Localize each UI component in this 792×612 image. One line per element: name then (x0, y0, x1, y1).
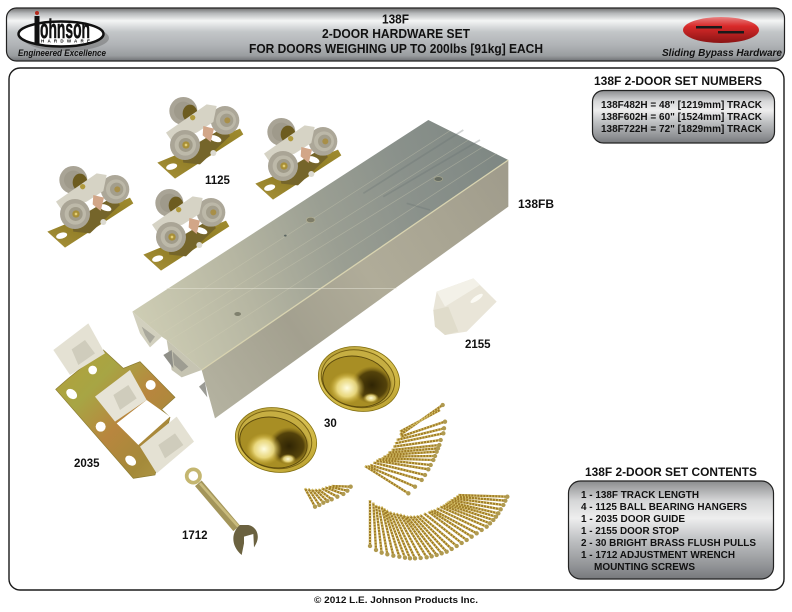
mounting screws (305, 405, 507, 558)
category label: Sliding Bypass Hardware (662, 47, 782, 59)
label 30: 30 (324, 418, 337, 430)
flush pull upper (312, 339, 406, 419)
heading: set numbers: 138F 2-DOOR SET NUMBERS (594, 74, 762, 88)
panel: set numbers: 138F482H = 48" [1219mm] TRACK (601, 100, 763, 111)
hanger 1125 top (157, 97, 243, 179)
panel: set contents: 1 - 2035 DOOR GUIDE (581, 514, 685, 525)
hanger 1125 left (47, 166, 133, 248)
panel: set contents: 1 - 138F TRACK LENGTH (581, 490, 699, 501)
hanger 1125 right (255, 118, 341, 200)
label 1125: 1125 (205, 175, 231, 187)
title text: 2-DOOR HARDWARE SET (322, 27, 470, 41)
panel: set contents: 2 - 30 BRIGHT BRASS FLUSH PULLS (581, 538, 756, 549)
door guide 2035 (53, 323, 194, 478)
label 138FB: 138FB (518, 199, 554, 211)
panel: set numbers (592, 90, 774, 143)
panel: set contents: 4 - 1125 BALL BEARING HANGERS (581, 502, 747, 513)
panel: set numbers: 138F722H = 72" [1829mm] TRACK (601, 124, 763, 135)
track 138FB (132, 120, 508, 418)
panel: set numbers: 138F602H = 60" [1524mm] TRACK (601, 112, 763, 123)
logo: Johnson Hardware: HARDWARE (41, 38, 90, 44)
wrench 1712 (187, 469, 258, 555)
door stop 2155 (433, 278, 497, 335)
footer copyright: © 2012 L.E. Johnson Products Inc. (314, 595, 478, 605)
title text (249, 12, 543, 56)
label 2155: 2155 (465, 339, 491, 351)
heading: set contents: 138F 2-DOOR SET CONTENTS (585, 465, 757, 479)
logo: Johnson Hardware: ohnson (40, 14, 90, 44)
logo: Johnson Hardware (18, 11, 109, 58)
icon: sliding bypass red oval (683, 17, 759, 43)
label 1712: 1712 (182, 530, 208, 542)
logo: Johnson Hardware: Engineered Excellence (18, 48, 106, 58)
label 2035: 2035 (74, 458, 100, 470)
header bar (6, 8, 784, 61)
panel: set contents: 1 - 2155 DOOR STOP (581, 526, 679, 537)
title text: FOR DOORS WEIGHING UP TO 200lbs [91kg] EACH (249, 42, 543, 56)
title text: 138F (382, 12, 409, 26)
hanger 1125 bottom (143, 189, 229, 271)
flush pull lower (229, 400, 323, 480)
panel: set contents: MOUNTING SCREWS (594, 562, 695, 573)
panel: set contents: 1 - 1712 ADJUSTMENT WRENCH (581, 550, 735, 561)
panel: set contents (568, 481, 774, 579)
